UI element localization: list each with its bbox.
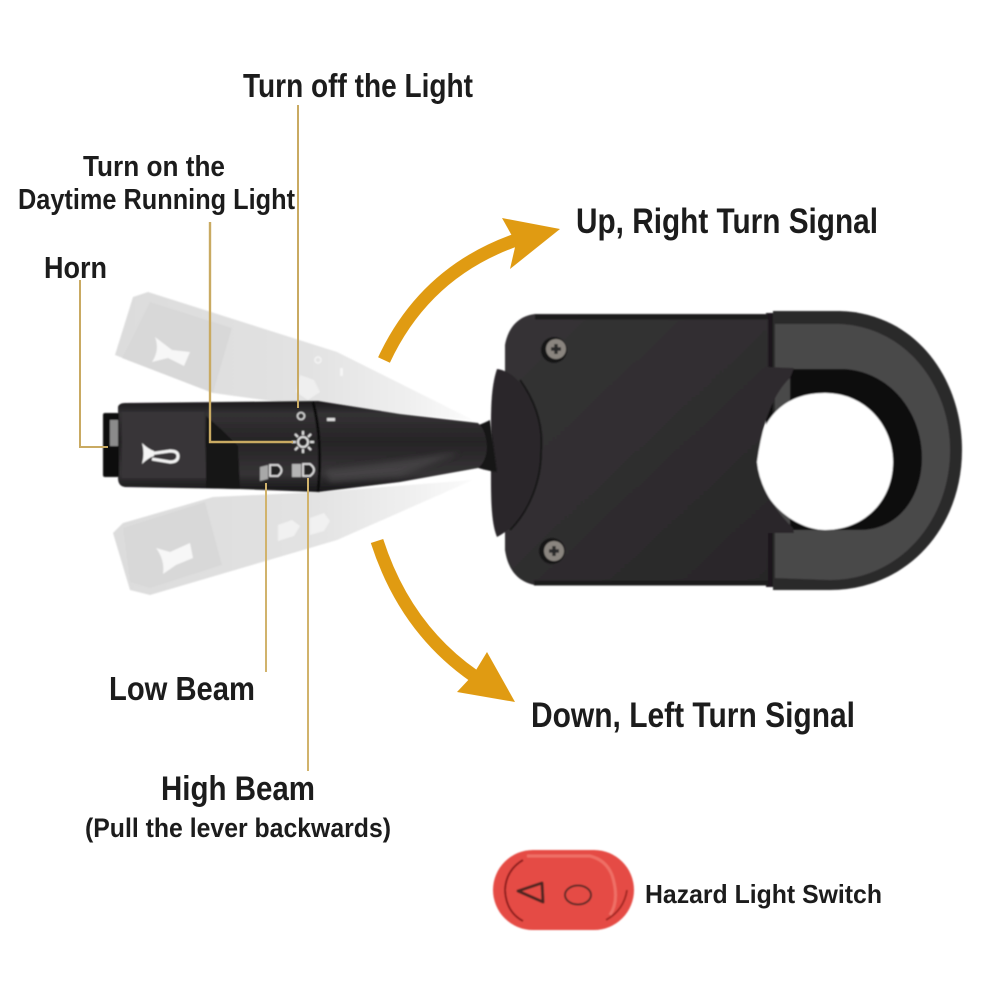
leader line: high beam <box>307 478 309 771</box>
mounting block <box>491 311 962 590</box>
ghost lever: raised position <box>115 292 473 420</box>
button right groove <box>606 890 627 920</box>
label: turn on the daytime running light <box>18 151 295 216</box>
icon: horn <box>142 443 178 464</box>
label: turn off the light: Turn off the Light <box>243 67 473 104</box>
label: turn on the daytime running light: Daytime Running Light <box>18 184 295 216</box>
ghost horn icon <box>152 337 190 366</box>
leader line: low beam <box>265 483 267 672</box>
icon: circle <box>565 886 591 904</box>
label: high beam: High Beam <box>161 770 315 808</box>
rubber boot <box>491 369 541 537</box>
ghost lever: lowered position <box>113 480 473 595</box>
icon: hazard triangle <box>518 883 543 902</box>
leader line: turn off the light <box>297 105 299 408</box>
clamp arch <box>773 311 962 590</box>
icon: high beam <box>292 464 314 477</box>
icon: parking mark <box>327 418 335 421</box>
button rim highlight <box>527 856 616 915</box>
label: high beam: (Pull the lever backwards) <box>85 813 391 843</box>
plate rim shade <box>534 317 768 583</box>
label: up, right turn signal: Up, Right Turn Signal <box>576 202 878 241</box>
icon: off ring <box>298 412 304 420</box>
icon: daytime light <box>292 431 314 453</box>
screw: bottom <box>539 538 565 564</box>
label: horn: Horn <box>44 250 107 285</box>
grip notch <box>206 416 240 489</box>
label: turn on the daytime running light: Turn on the <box>83 151 225 183</box>
main lever <box>103 401 497 492</box>
leader line: daytime running light <box>210 222 293 442</box>
clamp inner recess <box>790 369 922 530</box>
horn button end cap <box>103 413 119 477</box>
clamp through hole <box>757 393 893 530</box>
screw: top <box>541 337 567 363</box>
lever body <box>118 401 487 492</box>
label: hazard light switch: Hazard Light Switch <box>645 879 882 909</box>
main plate <box>505 314 794 585</box>
lever stem <box>470 420 497 472</box>
clamp lighter face <box>775 324 950 580</box>
collar ring edge <box>313 402 320 492</box>
button left groove <box>505 860 523 921</box>
label: down, left turn signal: Down, Left Turn Signal <box>531 696 855 735</box>
seam backing <box>766 313 776 587</box>
label: high beam <box>85 770 391 843</box>
hazard light switch button <box>493 850 634 930</box>
label: low beam: Low Beam <box>109 670 255 707</box>
arrow: down <box>377 541 515 702</box>
leader line: horn <box>80 280 108 447</box>
horn grip <box>122 412 206 478</box>
taper sheen <box>325 452 460 482</box>
arrow: up <box>384 218 560 360</box>
ghost horn icon <box>156 543 193 574</box>
icon: low beam <box>260 465 282 481</box>
boot edge <box>510 380 541 530</box>
